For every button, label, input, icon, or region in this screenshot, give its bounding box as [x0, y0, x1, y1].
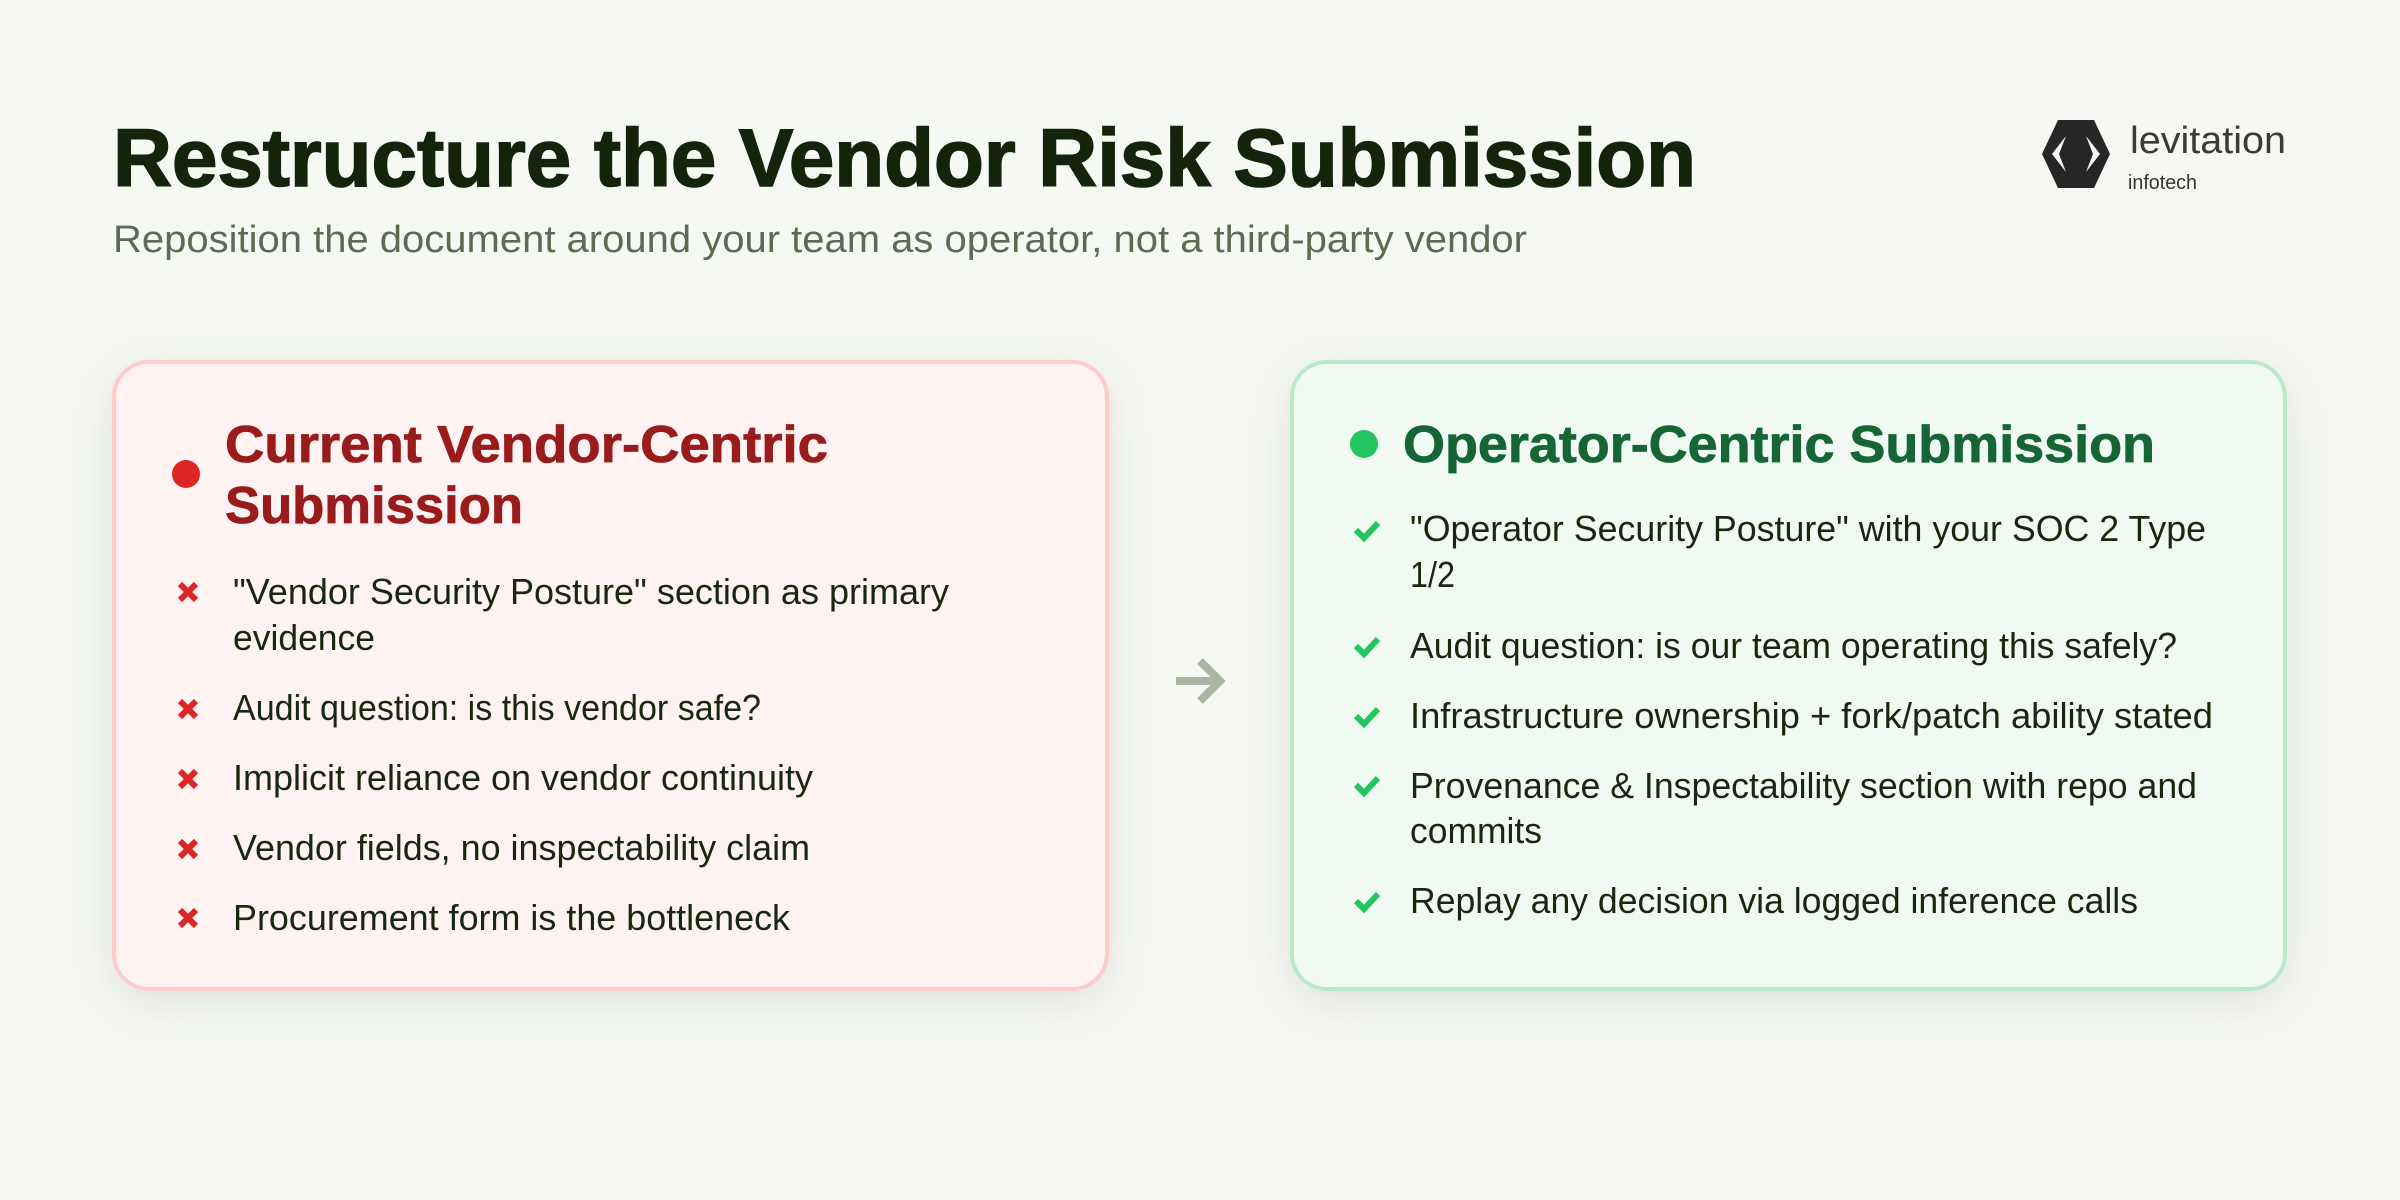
panel heading: Submission [225, 477, 523, 535]
logo wordmark: levitation [2130, 120, 2286, 162]
icon: hexagon logo mark [2042, 120, 2110, 188]
title: Restructure the Vendor Risk Submission [113, 113, 1696, 204]
logo tagline: infotech [2128, 172, 2197, 194]
item 1: "Vendor Security Posture" section as primary [233, 571, 949, 612]
panel background [114, 362, 1107, 989]
item 4: Provenance & Inspectability section with repo and [1410, 765, 2197, 806]
item 4: Vendor fields, no inspectability claim [233, 827, 810, 868]
item 1 [180, 571, 949, 658]
item 1: "Operator Security Posture" with your SOC 2 Type [1410, 508, 2206, 549]
status dot red [172, 460, 200, 488]
arrow [1176, 661, 1220, 701]
item 3: Implicit reliance on vendor continuity [233, 757, 813, 798]
item 4 [1356, 765, 2197, 851]
panel: current vendor-centric submission [114, 362, 1107, 989]
logo: levitation infotech [2042, 120, 2286, 194]
item 5: Procurement form is the bottleneck [233, 897, 791, 938]
panel heading: Current Vendor-Centric [225, 416, 828, 474]
item 2: Audit question: is our team operating this safely? [1410, 625, 2177, 666]
item 1: evidence [233, 617, 375, 658]
panel heading: Operator-Centric Submission [1403, 416, 2155, 474]
panel background [1292, 362, 2285, 989]
panel: operator-centric submission [1292, 362, 2285, 989]
status dot green [1350, 430, 1378, 458]
item 4: commits [1410, 810, 1542, 851]
subtitle: Reposition the document around your team as operator, not a third-party vendor [113, 219, 1527, 261]
item 1: 1/2 [1410, 554, 1455, 595]
item 5: Replay any decision via logged inference calls [1410, 880, 2138, 921]
item 2: Audit question: is this vendor safe? [233, 687, 761, 728]
item 3: Infrastructure ownership + fork/patch ability stated [1410, 695, 2213, 736]
item 1 [1356, 508, 2206, 595]
